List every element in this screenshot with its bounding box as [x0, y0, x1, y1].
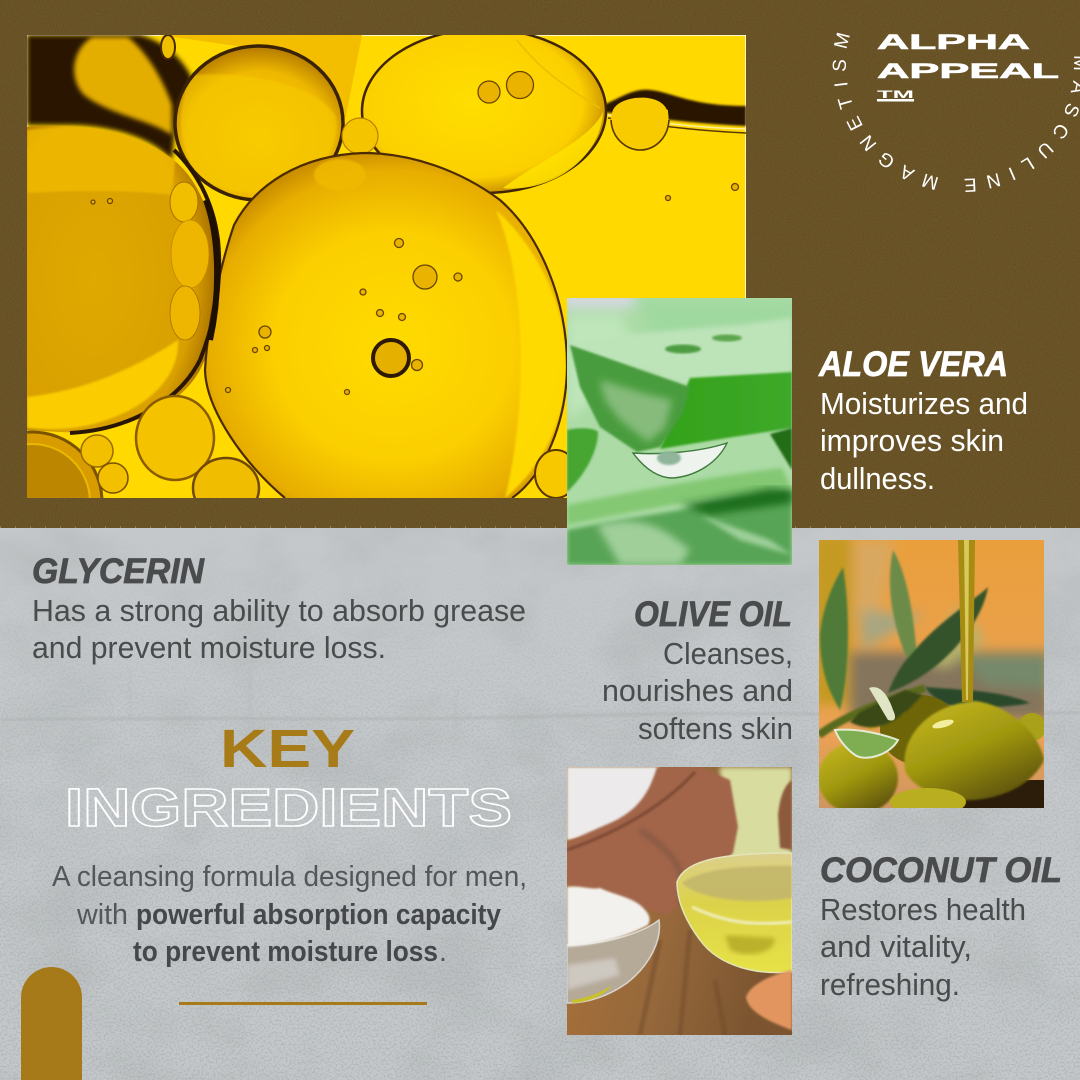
wood grain — [640, 930, 725, 1035]
main olive — [904, 701, 1044, 800]
lower pale leaf band — [567, 468, 792, 525]
water drop — [633, 443, 727, 478]
right dark band — [600, 90, 746, 126]
bubble: tiny centre joint — [342, 118, 378, 154]
bubble: small right — [611, 98, 669, 150]
description text: with — [76, 899, 128, 931]
photo: coconut and oil — [567, 767, 792, 1035]
coconut shell — [567, 767, 738, 915]
ingredient: glycerin: Has a strong ability to absorb grease — [32, 593, 526, 628]
ingredient: coconut oil: and vitality, — [820, 929, 972, 964]
ingredient: glycerin: and prevent moisture loss. — [32, 630, 386, 665]
blurred backdrop — [567, 298, 792, 414]
ingredient: aloe vera — [818, 345, 1028, 496]
description text — [52, 861, 527, 968]
amber blob upper left — [74, 37, 172, 135]
bubble: top middle — [175, 46, 343, 200]
small glass bowl with coconut flakes — [567, 920, 659, 1003]
pouring oil stream — [958, 540, 975, 702]
description text: powerful absorption capacity — [136, 899, 501, 931]
brand logo: TM — [877, 89, 914, 101]
lower dark leaf — [567, 490, 792, 565]
gold divider line — [179, 1002, 427, 1005]
brand logo: ALPHA — [877, 31, 1030, 54]
ingredient: olive oil — [602, 595, 793, 746]
oil bowl — [677, 853, 792, 973]
ingredient: olive oil: OLIVE OIL — [634, 595, 792, 634]
bubble: large centre — [205, 153, 567, 498]
background: brown textured upper section — [0, 0, 1080, 528]
dark upper-left corner — [27, 35, 192, 160]
ingredient: coconut oil — [820, 851, 1062, 1002]
leaf side — [660, 372, 792, 449]
photo: aloe vera — [560, 290, 800, 565]
ingredient: aloe vera: dullness. — [820, 461, 935, 496]
ingredient: coconut oil: COCONUT OIL — [820, 851, 1062, 890]
description text: A cleansing formula designed for men, — [52, 861, 527, 893]
ingredient: olive oil: nourishes and — [602, 673, 793, 708]
brand logo: APPEAL — [877, 60, 1059, 83]
left dark leaf — [567, 428, 598, 492]
inner lobes — [170, 182, 198, 222]
fingertip — [746, 970, 792, 1030]
pale leaves — [835, 730, 898, 758]
section title: key ingredients: KEY — [220, 719, 355, 779]
ingredient: coconut oil: refreshing. — [820, 967, 960, 1002]
ingredient: glycerin: GLYCERIN — [32, 552, 205, 591]
decorative gold pill — [21, 967, 82, 1080]
stem — [819, 688, 925, 735]
ingredient: aloe vera: Moisturizes and — [820, 386, 1028, 421]
leaves — [820, 550, 1030, 710]
photo: olives and oil — [812, 535, 1050, 816]
ingredient: coconut oil: Restores health — [820, 892, 1026, 927]
lower dark shade right — [770, 428, 792, 470]
olives — [880, 695, 950, 762]
bubbles: lower left cluster — [27, 430, 104, 498]
leaf top face — [630, 318, 792, 384]
ingredient: olive oil: softens skin — [638, 711, 793, 746]
droplets — [91, 72, 738, 394]
ingredient: glycerin — [32, 552, 526, 665]
background: concrete lower section — [0, 613, 1080, 1080]
ingredient: olive oil: Cleanses, — [663, 636, 793, 671]
description text: . — [439, 936, 447, 968]
photo: golden oil bubbles — [27, 35, 746, 498]
cut face — [570, 345, 690, 452]
bubble: top right — [362, 29, 606, 193]
description text: to prevent moisture loss — [133, 936, 438, 968]
section title: key ingredients: INGREDIENTS — [65, 778, 512, 838]
blurred backdrop — [812, 535, 1050, 720]
backdrop — [720, 767, 792, 862]
dark rim of left bubble — [70, 150, 219, 433]
section title: key ingredients — [65, 719, 512, 838]
bubble: large left — [27, 126, 219, 432]
ingredient: aloe vera: ALOE VERA — [818, 345, 1008, 384]
ingredient: aloe vera: improves skin — [820, 423, 1004, 458]
